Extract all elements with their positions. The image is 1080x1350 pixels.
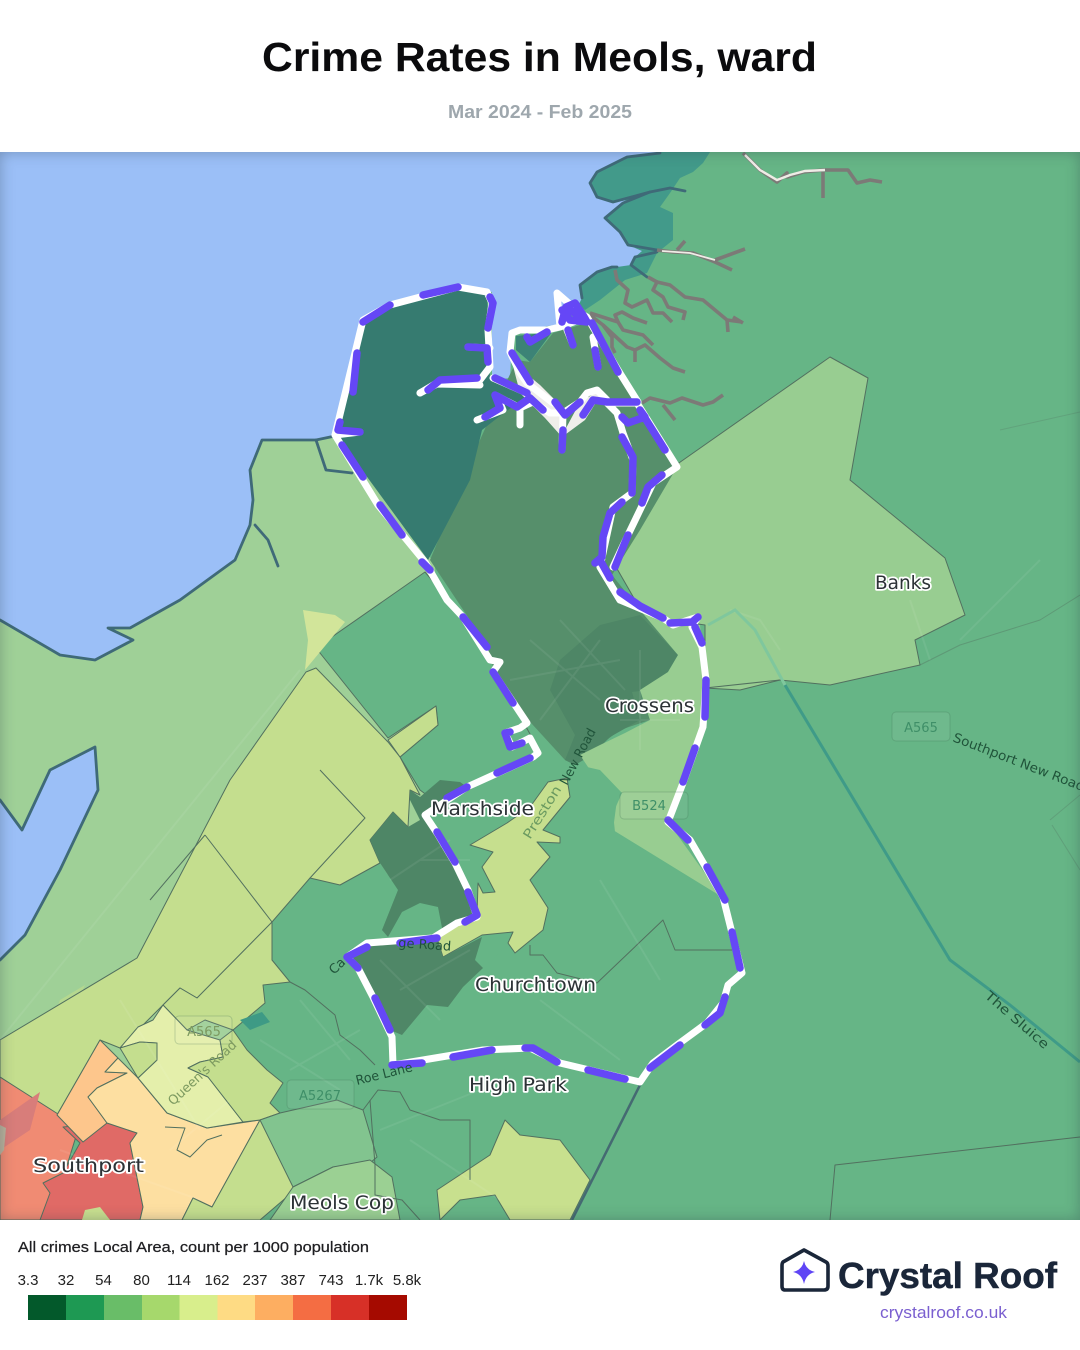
road labels: New Road [557,726,600,788]
zone: northern teal coast [570,152,710,310]
west land [0,430,440,1120]
legend values: 54 [95,1272,112,1289]
road labels: A5267 [299,1089,341,1104]
road shields [175,712,950,1109]
zone: Marshside dark [370,780,477,937]
legend values: 114 [167,1272,191,1289]
road labels: B524 [632,799,666,814]
zone: green block under yellow west [234,864,388,1040]
website url: crystalroof.co.uk [880,1304,1008,1322]
title: Crime Rates in Meols, ward [262,34,817,80]
zone: Preston New Road [437,778,570,957]
ward boundary [335,287,742,1082]
place labels: Marshside [431,798,534,820]
zone: orange [57,1040,127,1142]
purple knot at creek mouth [562,303,587,322]
zone: centre green wedge [588,767,622,831]
streets [0,560,1040,1200]
legend values: 162 [204,1272,230,1289]
place labels [33,572,931,1214]
water [0,152,660,660]
railway line [572,1085,640,1220]
rivers and creeks [590,153,882,420]
zone: lower left [182,1120,295,1220]
place labels: Churchtown [475,974,596,996]
logo: Crystal Roof [782,1250,1058,1322]
zone: notch and pale band [516,332,552,362]
zone: yellow green by Queen's Road [188,1030,283,1122]
teal pond [240,1012,270,1030]
zone: Banks [612,357,965,690]
zone: east strip [580,685,722,897]
zone: salmon red [0,1077,78,1220]
place labels: Southport [33,1155,144,1177]
zone: Crossens darker part [550,615,678,765]
legend values: 32 [58,1272,74,1289]
road labels: Roe Lane [354,1060,414,1089]
icon: house with star [782,1250,828,1290]
road labels: ge Road [398,936,452,955]
place labels: High Park [469,1074,567,1096]
road labels: Southport New Road [951,731,1080,795]
zone: teal north ward [335,287,530,560]
zone: medium green [260,1100,377,1187]
map [0,152,1080,1220]
road labels: Preston [521,783,565,842]
legend values: 743 [318,1272,344,1289]
road labels: The Sluice [980,988,1052,1053]
place labels: Meols Cop [290,1192,394,1214]
zone: Meols Cop [270,1160,400,1220]
zone: Churchtown dark [347,937,483,1035]
golf course patch [0,958,137,1087]
road labels: Queen's Road [165,1038,240,1109]
canal: The Sluice [785,685,1080,1062]
zone: dark red Southport [40,1123,143,1220]
road labels: A565 [187,1025,221,1040]
zone: strip beside Crossens [640,610,706,690]
legend values [18,1272,422,1289]
road labels [165,721,1080,1109]
subtitle: date range: Mar 2024 - Feb 2025 [448,102,632,122]
zone: Ainsdale marsh green block [316,572,540,805]
place labels: Crossens [605,695,694,717]
legend values: 1.7k [355,1272,384,1289]
dashed purple overlay [338,287,740,1079]
logo wordmark: Crystal Roof [838,1255,1058,1296]
water: lake [0,747,98,960]
zone: Crossens [430,325,678,765]
legend values: 387 [280,1272,306,1289]
road labels: Ca [326,955,349,978]
zone: pale orange [88,1058,260,1220]
legend colour scale [28,1295,407,1320]
zone: south yellow [437,1120,590,1220]
legend values: 80 [133,1272,150,1289]
place labels: Banks [875,572,931,594]
legend values: 237 [242,1272,268,1289]
boundary lines [290,412,1080,1220]
zone: yellow-green west [0,668,420,1115]
legend values: 3.3 [18,1272,38,1289]
zone: pale yellow Birkdale [120,1005,243,1128]
road labels: A565 [904,721,938,736]
legend title: All crimes Local Area, count per 1000 population [18,1239,369,1256]
legend [18,1239,422,1320]
coastline [0,153,685,960]
legend values: 5.8k [393,1272,422,1289]
